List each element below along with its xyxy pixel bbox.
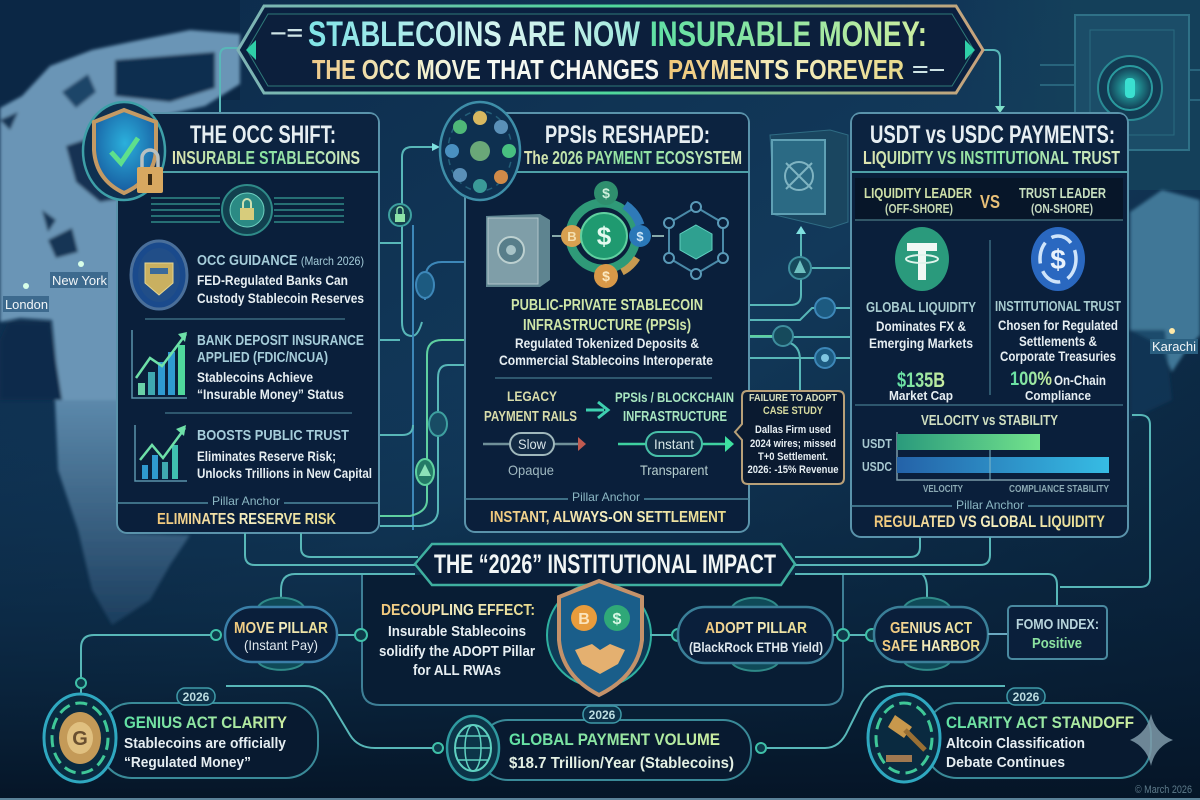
pill: move pillar: MOVE PILLAR [234,620,328,637]
title banner [238,6,983,93]
icon: background vault top right [1040,15,1200,150]
callout: failure to adopt case study: 2024 wires; missed [750,438,836,450]
icon: lock emblem [151,185,344,235]
icon: stablecoin ring [552,181,651,288]
heading: OCC shift: INSURABLE STABLECOINS [172,148,360,168]
text: global liquidity: $135B [897,369,945,392]
icon: stablecoin ring: $ [602,268,610,284]
milestone: global payment volume: 2026 [589,708,616,722]
icon: USDC logo: $ [1050,244,1066,275]
icon: stablecoin ring: $ [636,229,644,244]
comparison: legacy rails: LEGACY [507,388,558,404]
text: PPSI description: Commercial Stablecoins Interoperate [499,352,713,368]
heading: OCC shift [172,121,360,168]
pill: adopt pillar [678,598,833,671]
heading: PPSIs: The 2026 PAYMENT ECOSYSTEM [524,148,742,168]
text: institutional trust: Chosen for Regulated [998,317,1118,333]
milestone: clarity act standoff: Debate Continues [946,754,1065,771]
connectors: title to panels [220,48,1005,113]
text: bank deposit insurance: BANK DEPOSIT INSURANCE [197,333,364,349]
legend: leaders comparison: VS [980,192,1000,212]
milestone: genius act clarity: “Regulated Money” [124,754,251,771]
text: bank deposit insurance: “Insurable Money” Status [197,386,344,402]
icon: stablecoin ring: $ [597,221,612,251]
text: decoupling effect: Insurable Stablecoins [388,623,526,640]
map: north america [0,30,240,405]
text: global liquidity: GLOBAL LIQUIDITY [866,300,976,316]
text: boosts public trust: Eliminates Reserve Risk; [197,448,336,464]
milestone: global payment volume: $18.7 Trillion/Year (Stablecoins) [509,755,734,772]
city marker: Karachi: Karachi [1152,339,1196,354]
comparison: PPSI rails: Transparent [640,462,708,478]
city marker: London [3,283,49,312]
footer: pillar anchor: Pillar Anchor [212,494,280,508]
icon: blockchain hexagon [652,202,728,279]
pill: adopt pillar: (BlackRock ETHB Yield) [689,639,823,655]
title line 2: =− [912,60,945,80]
title line 2: PAYMENTS FOREVER [668,54,904,85]
comparison: PPSI rails: Instant [654,436,694,452]
milestone: genius act clarity [44,688,318,782]
footer: pillar anchor [157,494,336,528]
footer: pillar anchor: INSTANT, ALWAYS-ON SETTLEMENT [490,509,726,526]
icon: tree node [416,459,434,485]
footer: pillar anchor: Pillar Anchor [956,498,1024,512]
heading: USDT vs USDC: USDT vs USDC PAYMENTS: [870,121,1115,149]
comparison: PPSI rails: PPSIs / BLOCKCHAIN [615,389,734,405]
icon: document node [416,272,434,298]
milestone: genius act clarity: GENIUS ACT CLARITY [124,713,288,732]
pill: genius act safe harbor [833,598,988,670]
text: PPSI description: INFRASTRUCTURE (PPSIs) [523,317,691,334]
text: OCC guidance: FED-Regulated Banks Can [197,272,348,288]
city marker: New York: New York [52,273,107,288]
panel: PPSIs reshaped [465,113,749,532]
bar chart: velocity vs stability: USDT [862,436,892,451]
text: institutional trust: 100% [1010,369,1052,390]
bar chart: velocity vs stability [862,413,1110,495]
city marker: London: London [5,297,48,312]
callout: failure to adopt case study [735,391,844,484]
icon: shield with coins and handshake: B [578,611,590,628]
text: decoupling effect: solidify the ADOPT Pillar [379,643,535,660]
heading: OCC shift: THE OCC SHIFT: [190,121,336,149]
bar chart: velocity vs stability: VELOCITY [923,484,963,495]
milestone: genius act clarity: Stablecoins are officially [124,735,287,752]
icon: shield with coins and handshake [547,581,651,695]
title line 1 [270,15,927,54]
icon: shield node [815,348,835,368]
title line 2: THE OCC MOVE THAT CHANGES [312,54,659,85]
icon: safe [486,214,550,287]
callout: FOMO index: Positive [1032,635,1082,652]
milestone: global payment volume: GLOBAL PAYMENT VOLUME [509,730,720,749]
comparison: legacy rails [483,388,586,478]
text: decoupling effect: DECOUPLING EFFECT: [381,602,535,619]
city marker: New York [50,261,108,288]
comparison: PPSI rails: INFRASTRUCTURE [623,408,727,425]
bar chart: velocity vs stability: VELOCITY vs STABILITY [921,413,1058,429]
text: bank deposit insurance: Stablecoins Achieve [197,369,313,385]
banner: institutional impact heading: THE “2026” INSTITUTIONAL IMPACT [434,549,776,579]
icon: network of coins badge [440,102,520,200]
comparison: legacy rails: Slow [518,436,547,452]
icon: chart node [429,412,447,436]
legend: leaders comparison: (OFF-SHORE) [885,202,953,216]
banner: institutional impact heading [415,544,795,585]
heading: PPSIs [524,121,742,168]
panel: USDT vs USDC [851,113,1128,537]
city marker: Karachi [1150,328,1198,354]
legend: leaders comparison [864,186,1106,216]
connectors: panel 2 to panel 3 [750,226,851,391]
text: institutional trust: Compliance [1025,388,1091,403]
icon: Tether logo [895,227,949,291]
heading: PPSIs: PPSIs RESHAPED: [545,121,710,149]
text: boosts public trust: BOOSTS PUBLIC TRUST [197,427,349,444]
comparison: legacy rails: Opaque [508,462,554,478]
title line 1: −= [270,23,303,45]
text: OCC guidance: Custody Stablecoin Reserves [197,290,364,306]
legend: leaders comparison: LIQUIDITY LEADER [864,186,972,202]
text: global liquidity: Emerging Markets [869,335,973,351]
heading: USDT vs USDC: LIQUIDITY VS INSTITUTIONAL TRUST [863,148,1120,168]
text: PPSI description: Regulated Tokenized Deposits & [515,335,699,351]
icon: tree node [789,257,811,279]
icon: growth chart 1 [132,330,187,398]
text: decoupling effect: for ALL RWAs [413,662,501,679]
arrow: legacy to PPSIs [586,402,608,418]
text: institutional trust: Corporate Treasuries [1000,348,1116,364]
connectors: panel 1 to panel 2 [379,143,465,530]
icon: sparkle star [1130,714,1173,766]
text: PPSI description [499,297,713,368]
icon: OCC seal [131,241,187,309]
footer: pillar anchor: REGULATED VS GLOBAL LIQUIDITY [874,512,1106,531]
pill: move pillar [225,598,367,670]
text: global liquidity: Dominates FX & [876,318,966,334]
panel: the OCC shift [117,113,379,533]
pill: move pillar: (Instant Pay) [244,637,318,653]
text: bank deposit insurance [197,333,364,402]
title line 1: STABLECOINS ARE NOW [308,15,640,54]
callout: failure to adopt case study: CASE STUDY [763,405,824,417]
milestone: clarity act standoff: Altcoin Classification [946,735,1085,752]
bottom edge [0,798,1200,800]
icon: stablecoin ring: $ [602,185,610,201]
footer: pillar anchor [874,498,1106,531]
comparison: PPSI rails [615,389,734,478]
text: OCC guidance: OCC GUIDANCE (March 2026) [197,253,364,269]
icon: shield with coins and handshake: $ [613,611,622,628]
title line 1: INSURABLE MONEY: [650,15,927,54]
milestone: clarity act standoff: 2026 [1013,690,1040,704]
icon: stablecoin ring: B [567,229,577,244]
text: OCC guidance [197,253,364,306]
milestone: genius act clarity: 2026 [183,690,210,704]
world map backdrop [0,30,1200,625]
heading: USDT vs USDC [863,121,1120,168]
map: south america [55,400,190,625]
icon: USDC logo [1031,227,1085,291]
bar chart: velocity vs stability: COMPLIANCE STABILITY [1009,484,1109,495]
text: institutional trust: Settlements & [1019,333,1097,349]
callout: FOMO index [988,606,1107,659]
comparison: legacy rails: PAYMENT RAILS [484,408,577,425]
pill: adopt pillar: ADOPT PILLAR [705,620,807,637]
connectors: panels to impact section [76,415,1150,753]
text: boosts public trust [197,427,372,481]
text: global liquidity: Market Cap [889,388,953,403]
footer: pillar anchor [490,490,726,526]
callout: failure to adopt case study: 2026: -15% Revenue [748,464,838,476]
footer: pillar anchor: ELIMINATES RESERVE RISK [157,511,336,528]
callout: failure to adopt case study: FAILURE TO ADOPT [749,392,837,404]
milestone: clarity act standoff [868,688,1151,782]
panel: institutional impact section [362,544,843,705]
icon: growth chart 2 [135,425,187,481]
footer: pillar anchor: Pillar Anchor [572,490,640,504]
bar chart: velocity vs stability: USDC [862,459,892,474]
text: institutional trust [995,299,1121,403]
text: global liquidity [866,300,976,403]
icon: person node [773,326,793,346]
text: institutional trust: On-Chain [1054,372,1106,388]
milestone: clarity act standoff: CLARITY ACT STANDOFF [946,713,1134,732]
map: asia [1130,190,1200,372]
icon: shield with padlock badge [83,102,165,200]
callout: FOMO index: FOMO INDEX: [1016,616,1099,633]
legend: leaders comparison: TRUST LEADER [1019,186,1106,202]
milestone: global payment volume [447,706,751,780]
text: boosts public trust: Unlocks Trillions in New Capital [197,465,372,481]
icon: bank node [815,298,835,318]
text: bank deposit insurance: APPLIED (FDIC/NCUA) [197,350,328,366]
text: institutional trust: INSTITUTIONAL TRUST [995,299,1121,315]
pill: genius act safe harbor: GENIUS ACT [890,620,972,637]
milestone: genius act clarity: G [72,728,88,750]
callout: failure to adopt case study: Dallas Firm used [755,424,831,436]
icon: lock node [389,204,411,226]
text: PPSI description: PUBLIC-PRIVATE STABLECOIN [511,297,703,314]
text: decoupling effect [379,602,535,679]
pill: genius act safe harbor: SAFE HARBOR [882,638,980,655]
legend: leaders comparison: (ON-SHORE) [1031,202,1093,216]
icon: vault between panels [770,130,848,228]
callout: failure to adopt case study: T+0 Settlement. [758,451,828,463]
